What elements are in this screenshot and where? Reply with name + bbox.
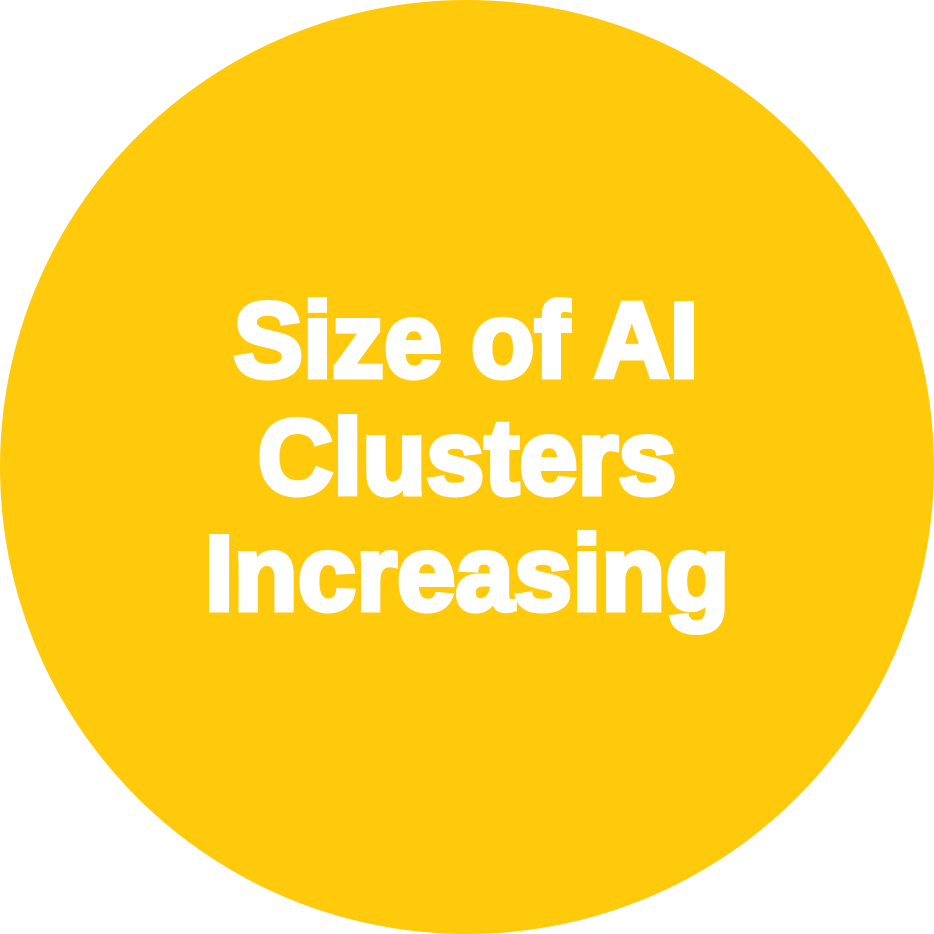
- title: Size of AI Clusters Increasing: Increasing: [204, 513, 730, 633]
- title: Size of AI Clusters Increasing: Clusters: [258, 397, 676, 517]
- title: Size of AI Clusters Increasing: Size of AI: [234, 280, 698, 400]
- title: Size of AI Clusters Increasing: [204, 280, 730, 633]
